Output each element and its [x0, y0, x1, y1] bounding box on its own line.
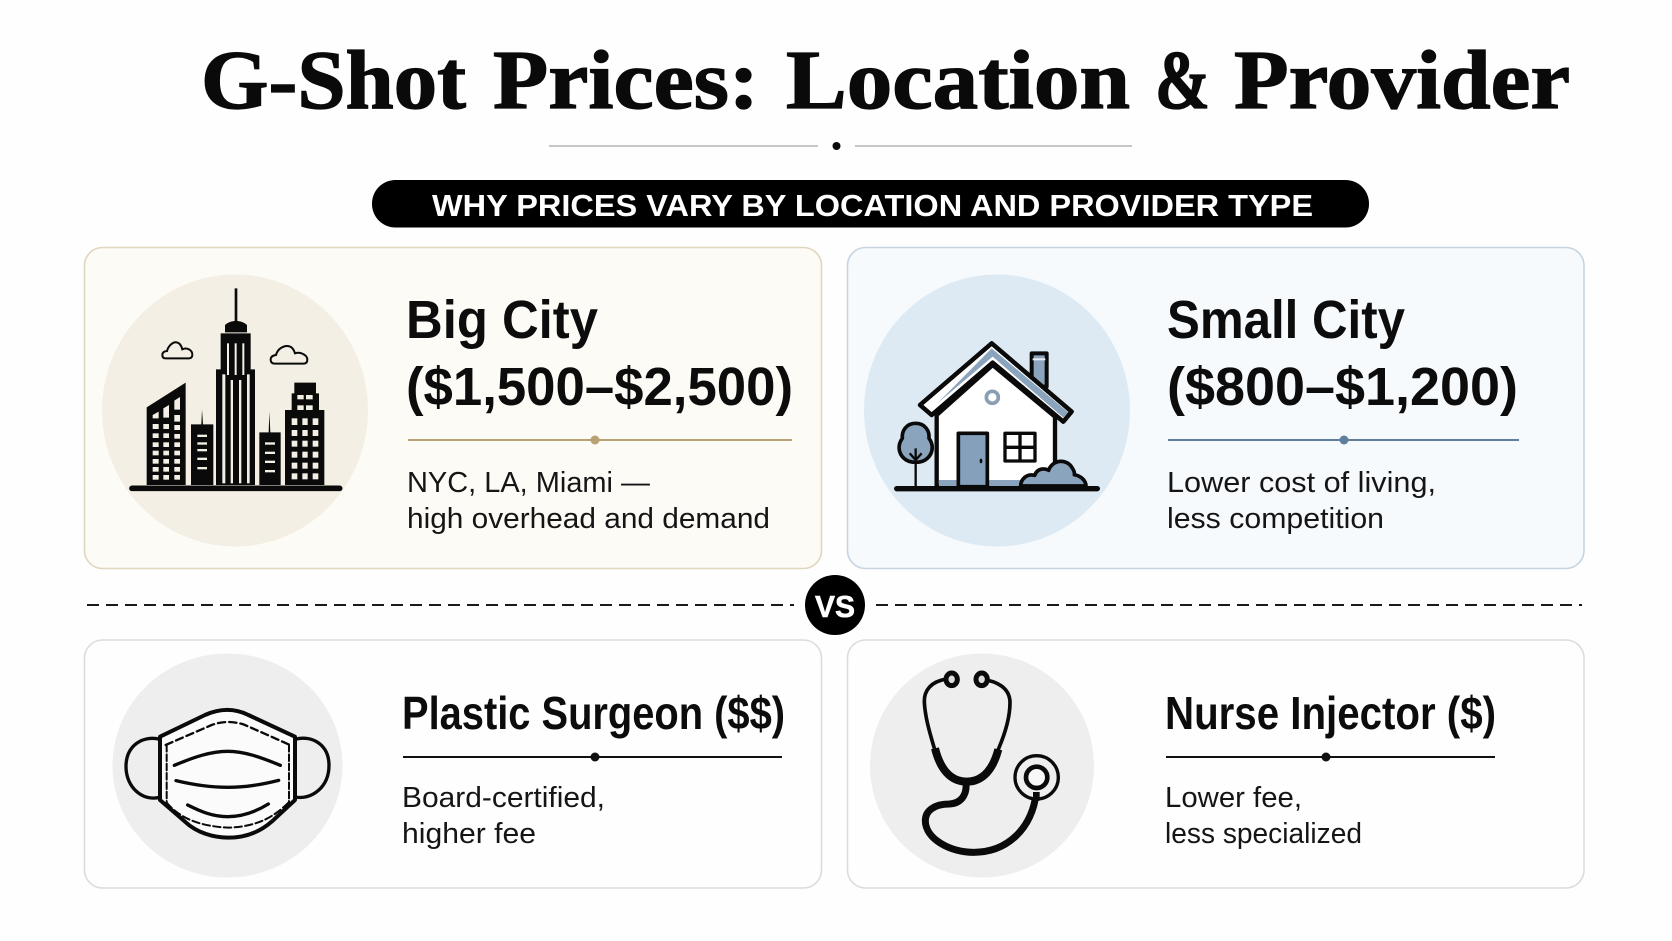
heading: plastic surgeon: Plastic Surgeon ($$) [402, 687, 785, 739]
title: Location [786, 34, 1130, 127]
description: nurse injector: Lower fee, [1165, 782, 1302, 814]
title: Provider [1234, 34, 1570, 127]
vs divider: VS [815, 589, 855, 624]
title divider [549, 142, 1132, 150]
heading: small city: ($800–$1,200) [1167, 357, 1518, 417]
heading: big city: ($1,500–$2,500) [406, 357, 793, 417]
description: small city: less competition [1167, 503, 1384, 535]
description: big city [407, 467, 770, 535]
description: plastic surgeon: Board-certified, [402, 782, 605, 814]
description: nurse injector: less specialized [1165, 818, 1362, 850]
heading: big city [406, 290, 793, 417]
icon: stethoscope [870, 654, 1094, 878]
divider: big city [408, 436, 792, 444]
description: plastic surgeon: higher fee [402, 818, 536, 850]
title: Prices: [493, 34, 759, 127]
description: plastic surgeon [402, 782, 605, 850]
panel: plastic surgeon [84, 640, 822, 888]
heading: small city: Small City [1167, 290, 1405, 350]
section banner [372, 180, 1369, 228]
description: big city: high overhead and demand [407, 503, 770, 535]
description: small city [1167, 467, 1436, 535]
divider: plastic surgeon [403, 752, 782, 762]
title [201, 34, 1570, 127]
description: big city: NYC, LA, Miami — [407, 467, 650, 499]
divider: nurse injector [1166, 752, 1495, 762]
title: G-Shot [201, 34, 466, 127]
section banner: WHY PRICES VARY BY LOCATION AND PROVIDER TYPE [432, 188, 1313, 223]
icon: house [864, 274, 1130, 546]
icon: surgical mask [112, 654, 342, 878]
description: small city: Lower cost of living, [1167, 467, 1436, 499]
vs divider [87, 575, 1582, 635]
panel: nurse injector [848, 640, 1584, 888]
heading: nurse injector: Nurse Injector ($) [1165, 687, 1496, 739]
icon: city skyline [102, 274, 368, 546]
description: nurse injector [1165, 782, 1362, 850]
heading: small city [1167, 290, 1518, 417]
panel: big city [84, 248, 822, 568]
heading: big city: Big City [406, 290, 598, 350]
divider: small city [1168, 436, 1519, 444]
title: & [1155, 34, 1210, 127]
panel: small city [848, 248, 1584, 568]
